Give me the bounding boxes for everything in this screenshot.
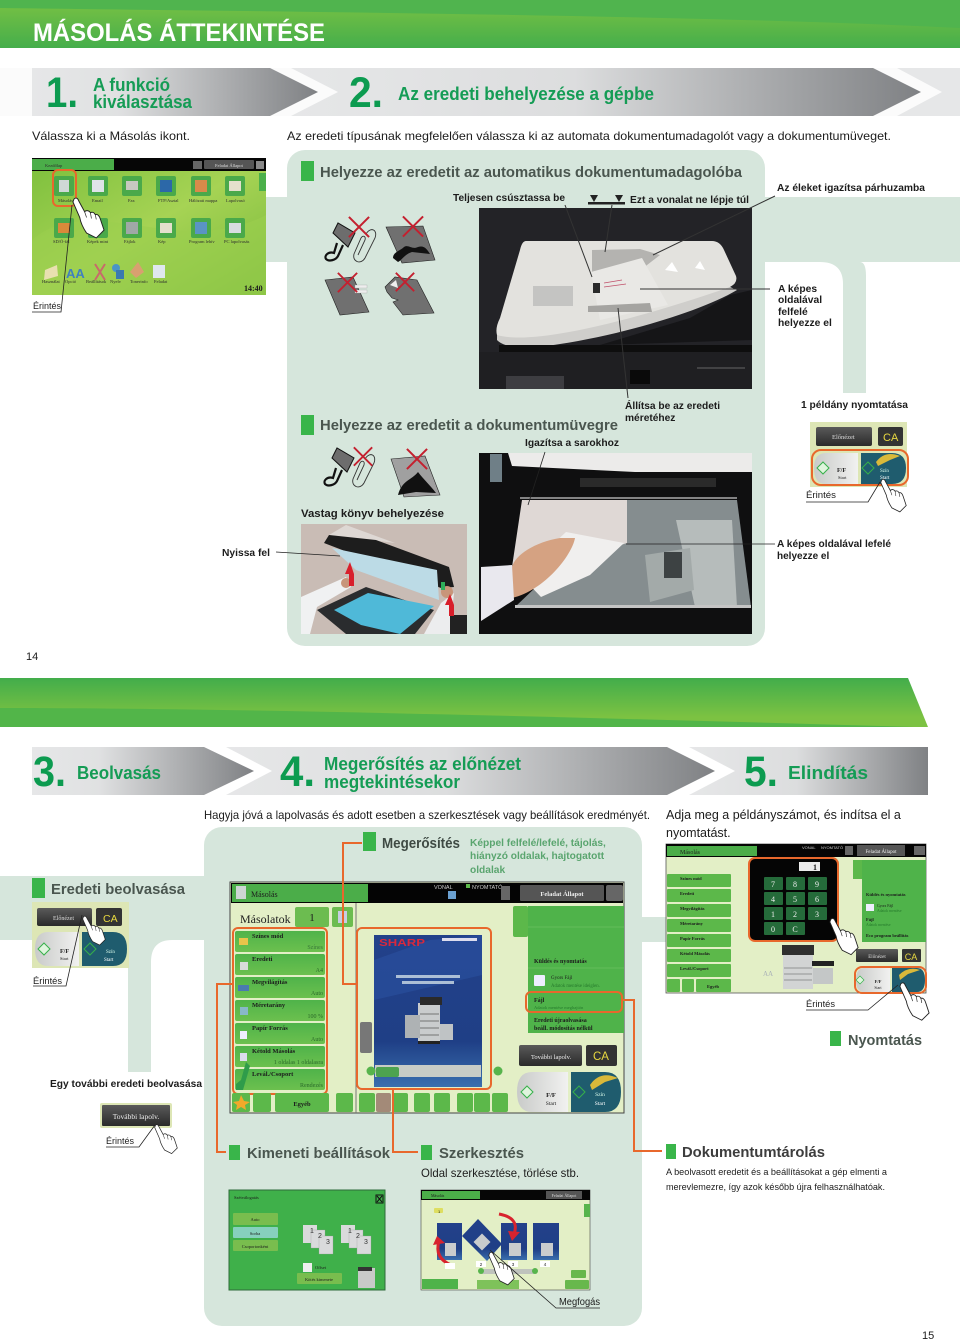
heading: confirm <box>363 832 460 852</box>
printer illustration <box>782 945 814 955</box>
step 5 banner <box>689 747 928 796</box>
main copy screen: Színes <box>307 945 324 951</box>
output screen: Sorba <box>250 1231 260 1236</box>
screen buttons <box>519 1045 582 1066</box>
copy count screen: Méretarány <box>680 921 704 926</box>
connector bands top <box>260 197 960 393</box>
heading: output: Kimeneti beállítások <box>247 1145 391 1162</box>
main copy screen: Levál./Csoport <box>252 1071 294 1078</box>
main copy screen: VONAL <box>434 885 453 891</box>
main copy screen: 100 % <box>308 1014 323 1020</box>
bottom toolbar <box>232 1093 508 1112</box>
step 1 banner: A funkció <box>93 74 170 95</box>
green note: hiányzó oldalak, hajtogatott <box>470 851 605 862</box>
buttons: print 1 copy: Előnézet <box>832 434 855 441</box>
main copy screen: Gyors Fájl <box>551 976 573 981</box>
connector bands bottom <box>0 876 666 1072</box>
output screen: 3 <box>326 1239 330 1246</box>
copy count screen: Küldés és nyomtatás <box>866 892 906 897</box>
copy count screen: Eredeti <box>680 891 695 896</box>
panel: original placement <box>287 150 765 646</box>
touch label: Érintés <box>33 301 61 312</box>
buttons: scan <box>32 902 129 968</box>
button: next scan: További lapolv. <box>113 1112 159 1121</box>
touch label <box>32 205 72 312</box>
copy count screen: Start <box>874 986 883 990</box>
step 5 text: nyomtatást. <box>666 826 731 840</box>
orange connectors <box>217 843 662 1152</box>
step 4 text: Hagyja jóvá a lapolvasás és adott esetben a szerkesztések vagy beállítások eredményét. <box>204 808 650 822</box>
icon: no taped sheet <box>325 273 369 315</box>
main copy screen: Auto <box>311 1037 323 1043</box>
icon: hand <box>881 479 906 512</box>
copy count screen <box>666 844 929 1020</box>
label: grab <box>490 1250 600 1308</box>
step 2 banner: 2. <box>349 69 383 117</box>
touch screen: home: Feladat Állapot <box>215 163 244 168</box>
copy count screen: Levál./Csoport <box>680 966 709 971</box>
touch screen: home: Kezdőlap <box>45 163 63 168</box>
label: 1 copy: 1 példány nyomtatása <box>801 400 908 411</box>
buttons: print 1 copy: F/F <box>837 468 846 474</box>
settings rows <box>235 931 325 1090</box>
label: image side up: felfelé <box>778 307 808 318</box>
main copy screen: Egyéb <box>293 1101 311 1108</box>
buttons: scan: CA <box>103 913 118 925</box>
step 4 banner <box>226 747 715 796</box>
icon row 3: AA <box>66 266 85 281</box>
green note: Képpel felfelé/lefelé, tájolás, <box>470 838 606 849</box>
output screen: Offset <box>315 1265 327 1270</box>
buttons <box>856 949 898 962</box>
touch screen: home: Opció <box>65 279 77 284</box>
label: Ezt a vonalat ne lépje túl <box>630 195 749 206</box>
main copy screen: Rendezés <box>300 1083 324 1089</box>
copy count screen: C <box>792 925 798 934</box>
buttons: scan: Start <box>60 956 69 961</box>
label: image side up: helyezze el <box>778 318 832 329</box>
copy count screen: F/F <box>875 979 882 984</box>
buttons: print 1 copy: Start <box>880 476 890 481</box>
step 2 banner: Az eredeti behelyezése a gépbe <box>398 83 654 104</box>
main copy screen: Színes mód <box>252 933 284 940</box>
copy count screen: Papír Forrás <box>680 936 705 941</box>
copy count screen: 9 <box>815 880 819 889</box>
main copy screen: F/F <box>546 1092 556 1099</box>
edit text: Oldal szerkesztése, törlése stb. <box>421 1166 579 1180</box>
icon: no clips <box>325 217 376 262</box>
label: image side up: A képes <box>778 284 817 295</box>
copy count screen: Feladat Állapot <box>866 849 897 855</box>
header band <box>0 0 960 48</box>
step 3 banner: Beolvasás <box>77 763 161 783</box>
label: face down: helyezze el <box>777 551 829 562</box>
touch screen: home: Másolás <box>58 198 73 203</box>
edit screen: 1 <box>438 1209 441 1214</box>
main copy screen: Szín <box>595 1092 605 1098</box>
photo: glass placement <box>479 453 752 634</box>
touch screen: home: Fax <box>128 198 136 203</box>
buttons: print 1 copy: Start <box>838 475 847 480</box>
touch screen: home: Beállítások <box>86 279 107 284</box>
heading: ADF: Helyezze az eredetit az automatikus dokumentumadagolóba <box>320 165 743 181</box>
photo: document feeder <box>479 208 752 389</box>
heading: scan original: Eredeti beolvasása <box>51 881 186 898</box>
touch label <box>806 985 898 1010</box>
step 3 banner <box>32 747 254 796</box>
heading: edit: Szerkesztés <box>439 1145 524 1162</box>
buttons: print 1 copy: CA <box>883 432 899 444</box>
output screen: 2 <box>356 1233 360 1240</box>
copies count: Másolatok <box>240 912 291 926</box>
label: open <box>222 548 340 559</box>
copy count screen: 7 <box>771 880 775 889</box>
step 1 banner: 1. <box>46 69 78 117</box>
touch screen: home: Program lehív <box>189 239 215 244</box>
label: grab: Megfogás <box>559 1297 600 1308</box>
step 2 text: Az eredeti típusának megfelelően válassza ki az automata dokumentumadagolót vagy a dokumentumüveget. <box>287 129 891 143</box>
main copy screen: Adatok mentése ideiglen. <box>551 984 600 989</box>
output screen: 1 <box>348 1228 352 1235</box>
icon: no dirty sheet <box>386 216 435 263</box>
labels ADF: Teljesen csúsztassa be <box>453 193 565 204</box>
edit screen <box>421 1190 590 1290</box>
buttons: scan: Szín <box>106 950 115 955</box>
copy count screen: Színes mód <box>680 876 702 881</box>
heading: print: Nyomtatás <box>848 1032 922 1049</box>
edit screen: 2 <box>480 1262 483 1267</box>
copy count screen: CA <box>905 952 917 962</box>
buttons: scan: Start <box>104 958 114 963</box>
icon row 3 <box>44 262 165 281</box>
edit screen: Másolás <box>431 1193 445 1198</box>
main copy screen: Küldés és nyomtatás <box>534 959 587 965</box>
main copy screen: Eredeti újraolvasása <box>534 1018 587 1024</box>
icon: no torn sheet <box>385 273 434 315</box>
heading: document filing: Dokumentumtárolás <box>682 1144 825 1161</box>
right panel <box>853 860 862 879</box>
main copy screen: CA <box>593 1051 609 1063</box>
main copy screen: SHARP <box>379 937 425 949</box>
icon: hand <box>155 1125 177 1154</box>
copy count screen: Adatok mentése <box>877 909 902 913</box>
copy count screen: Megvilágítás <box>680 906 705 911</box>
copy count screen: 2 <box>793 910 797 919</box>
edit screen: Feladat Állapot <box>552 1193 577 1198</box>
left rows <box>667 874 731 992</box>
buttons: scan: F/F <box>60 949 69 955</box>
touch screen: home <box>32 158 266 295</box>
touch screen: home: Fájlok <box>124 239 136 244</box>
button: next scan <box>100 1103 172 1128</box>
main copy screen: Adatok mentése meghajtón <box>534 1005 584 1010</box>
filing text: A beolvasott eredetit és a beállításokat a gép elmenti a <box>666 1167 887 1177</box>
main copy screen: Fájl <box>534 998 545 1004</box>
label: align to corner: Igazítsa a sarokhoz <box>525 438 619 449</box>
output screen: Auto <box>250 1217 260 1222</box>
label: image side up: oldalával <box>778 295 822 306</box>
touch screen: home: Email <box>92 198 103 203</box>
main copy screen: Eredeti <box>252 956 273 963</box>
step 1 text: Válassza ki a Másolás ikont. <box>32 129 190 143</box>
title: MÁSOLÁS ÁTTEKINTÉSE <box>33 18 325 47</box>
main copy screen: További lapolv. <box>531 1054 572 1061</box>
label: Az éleket igazítsa párhuzamba <box>777 183 925 194</box>
main copy screen: 1 oldalas 1 oldalasra <box>274 1060 323 1066</box>
main copy screen: A4 <box>316 968 323 974</box>
output screen: Szétválogatás <box>234 1195 259 1200</box>
label: face down: A képes oldalával lefelé <box>777 539 891 550</box>
step 5 banner: Elindítás <box>788 763 868 783</box>
output screen: 1 <box>310 1228 314 1235</box>
label: open: Nyissa fel <box>222 548 270 559</box>
main copy screen: Start <box>546 1101 557 1107</box>
icon: no dirty sheet <box>391 449 440 497</box>
copy count screen: 3 <box>815 910 819 919</box>
copy count screen: Fájl <box>866 917 874 922</box>
callout lines glass <box>528 452 775 544</box>
heading: glass: Helyezze az eredetit a dokumentumüvegre <box>320 418 618 434</box>
panel: confirmation <box>204 827 642 1326</box>
touch label: Érintés <box>806 999 835 1010</box>
preview document <box>374 935 482 1087</box>
main copy screen: Feladat Állapot <box>540 890 584 898</box>
copy count screen: 5 <box>793 895 797 904</box>
copy count screen: Kétold Másolás <box>680 951 710 956</box>
step 2 banner <box>291 68 960 117</box>
main copy screen: Megvilágítás <box>252 979 288 986</box>
output screen: Csoportonként <box>242 1244 269 1249</box>
copy count screen: Másolás <box>680 850 701 856</box>
main copy screen: Méretarány <box>252 1002 286 1009</box>
touch screen: home: SD/Ö-fál <box>53 239 70 244</box>
preview slider <box>375 1065 481 1077</box>
step 3 banner: 3. <box>33 748 66 796</box>
mark: max line <box>588 195 625 204</box>
photo: book on glass <box>301 524 467 634</box>
copy count screen: Egyéb <box>707 984 719 989</box>
touch label <box>33 915 82 987</box>
touch screen: home: Képek mint <box>87 239 109 244</box>
step 4 banner: megtekintésekor <box>324 772 460 792</box>
copy count screen: NYOMTATÓ <box>821 845 843 850</box>
buttons: print 1 copy: Szín <box>880 469 889 474</box>
touch screen: home: Lapolvasó <box>226 198 245 203</box>
touch screen: home: Feladat <box>154 279 168 284</box>
label: adjust size: méretéhez <box>625 413 675 424</box>
copy count screen: 8 <box>793 880 797 889</box>
step 4 banner: 4. <box>280 748 315 796</box>
copy count screen: 6 <box>815 895 819 904</box>
output screen <box>229 1190 385 1290</box>
copy count screen: 0 <box>771 925 775 934</box>
touch screen: home: Kép <box>158 239 166 244</box>
edit screen: 4 <box>544 1262 547 1267</box>
touch screen: home: Tonerinfo <box>130 279 148 284</box>
touch screen: home: FTP/Asztal <box>158 198 179 203</box>
touch label <box>106 1125 155 1147</box>
callout lines ADF <box>565 196 775 398</box>
output screen: 3 <box>364 1239 368 1246</box>
copy count screen: Eco program beállítás <box>866 933 909 938</box>
buttons: scan: Előnézet <box>53 916 74 922</box>
copy count screen: 4 <box>771 895 775 904</box>
main copy screen: 1 <box>309 912 315 924</box>
icon: no clips <box>324 447 375 487</box>
green note: oldalak <box>470 865 505 876</box>
copy count screen: 1 <box>813 863 817 872</box>
main copy screen: Auto <box>311 991 323 997</box>
main copy screen: NYOMTATÓ <box>472 884 503 891</box>
step 4 banner: Megerősítés az előnézet <box>324 754 521 774</box>
printer <box>418 1003 440 1041</box>
touch label <box>806 482 880 502</box>
copy count screen: Előnézet <box>868 955 886 960</box>
main copy screen <box>230 882 624 1113</box>
right action panel <box>513 906 528 937</box>
touch screen: home: Hálózati mappa <box>189 198 217 203</box>
main copy screen: Kétold Másolás <box>252 1048 296 1055</box>
main copy screen: beáll. módosítás nélkül <box>534 1026 593 1032</box>
main copy screen: Papír Forrás <box>252 1025 288 1032</box>
step 1 banner <box>32 68 318 117</box>
icon tiles row 1 <box>54 176 245 238</box>
copy count screen: 1 <box>771 910 775 919</box>
output screen: 2 <box>318 1233 322 1240</box>
touch label: Érintés <box>806 490 836 501</box>
copy count screen: Adatok mentése <box>866 923 891 927</box>
step 5 text: Adja meg a példányszámot, és indítsa el a <box>666 808 901 822</box>
green band middle <box>0 678 928 727</box>
output screen: Kötés kimenete <box>305 1277 333 1282</box>
label: next original: Egy további eredeti beolvasása <box>50 1078 202 1090</box>
copy count screen: AA <box>763 970 773 978</box>
label: thick book: Vastag könyv behelyezése <box>301 508 444 520</box>
copy count screen: Gyors Fájl <box>877 904 893 908</box>
copy count screen: VONAL <box>802 845 816 850</box>
touch screen: home: Használat <box>42 279 60 284</box>
touch screen: home: PC lapolvasás <box>224 239 250 244</box>
touch label: Érintés <box>33 976 62 987</box>
label: adjust size: Állítsa be az eredeti <box>625 399 720 412</box>
step 1 banner: kiválasztása <box>93 91 193 112</box>
edit screen: 3 <box>512 1262 515 1267</box>
touch screen: home: 14:40 <box>244 284 263 293</box>
touch label: Érintés <box>106 1136 134 1147</box>
keypad <box>749 858 838 941</box>
main copy screen: Másolás <box>251 890 278 899</box>
page number 14: 14 <box>26 651 38 663</box>
main copy screen: Start <box>595 1101 606 1107</box>
step 5 banner: 5. <box>744 748 778 796</box>
buttons: print 1 copy <box>810 422 908 487</box>
filing text: merevlemezre, így azok később újra felhasználhatóak. <box>666 1182 885 1192</box>
heading: confirm: Megerősítés <box>382 835 460 852</box>
touch screen: home: Nyelv <box>110 279 122 284</box>
